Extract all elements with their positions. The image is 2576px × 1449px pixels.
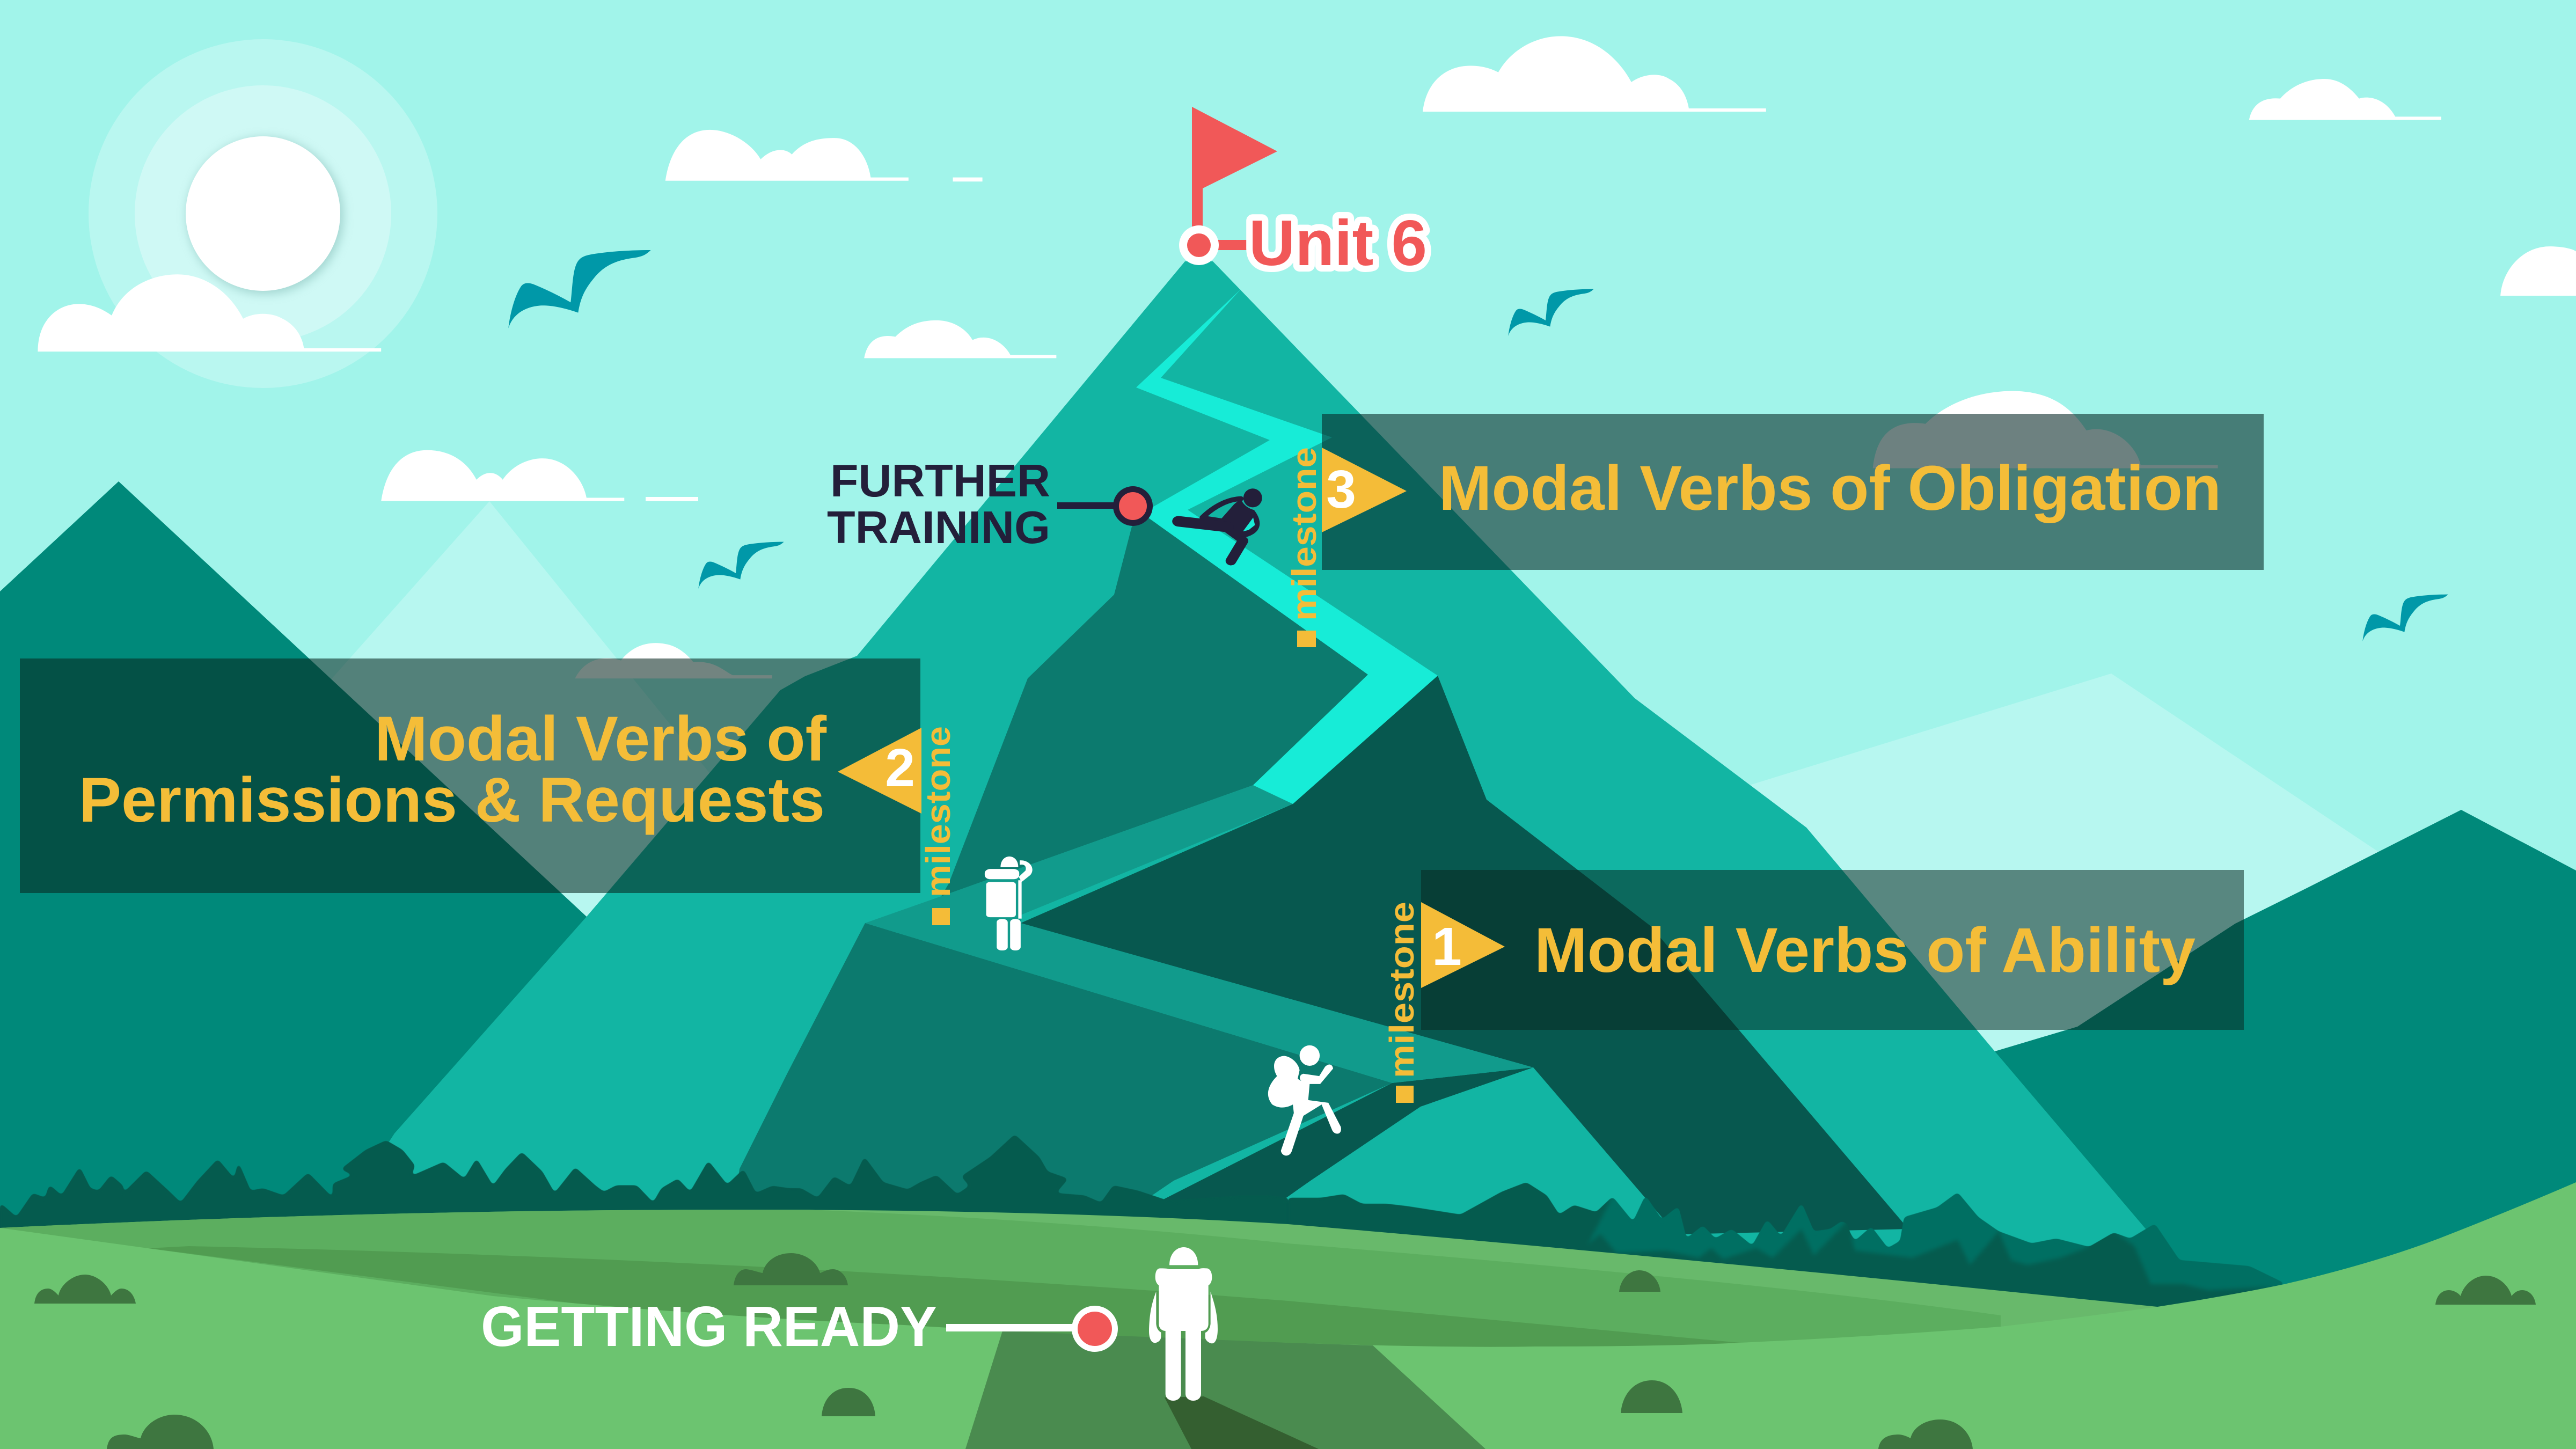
main mountain xyxy=(322,261,2200,1288)
dark hill band xyxy=(148,1246,1740,1395)
heading: modal verbs of permissions and requests xyxy=(79,704,827,836)
label: further training xyxy=(827,456,1050,553)
milestone 2 marker xyxy=(838,726,957,925)
trail shadow xyxy=(1165,1396,1319,1449)
milestone 3 marker: milestone xyxy=(1285,447,1323,621)
panel: modal verbs of permissions and requests xyxy=(20,658,920,893)
forest left and centre xyxy=(0,1135,1289,1255)
back hill xyxy=(0,1210,2157,1449)
clouds xyxy=(38,36,2576,501)
pale distant mountains xyxy=(258,501,2382,1073)
trail xyxy=(965,1331,1485,1449)
milestone 3 marker: 3 xyxy=(1326,459,1356,519)
further training node xyxy=(1057,486,1153,526)
bushes xyxy=(34,1253,2536,1449)
dark side mountains xyxy=(0,481,2576,1288)
milestone 2 marker: milestone xyxy=(919,726,957,897)
foreground meadow xyxy=(0,1182,2576,1449)
icon: hiker with bedroll xyxy=(985,857,1033,950)
mid hill band xyxy=(0,1210,2001,1449)
climbing route upper cyan band xyxy=(1136,289,1438,804)
mountain shadow facets xyxy=(730,517,1908,1234)
milestone 3 marker xyxy=(1285,447,1407,647)
summit flag xyxy=(1179,107,1277,265)
label: further training: FURTHER xyxy=(830,456,1050,507)
panel: modal verbs of ability xyxy=(1421,870,2244,1030)
birds xyxy=(508,250,2448,641)
climbing route lower band xyxy=(865,785,1533,1083)
cloud behind permissions box xyxy=(575,643,772,678)
panel: modal verbs of obligation xyxy=(1322,414,2264,570)
milestone 2 marker: 2 xyxy=(885,738,915,798)
milestone 1 marker: 1 xyxy=(1432,917,1462,977)
heading: modal verbs of permissions and requests: Permissions & Requests xyxy=(79,765,825,836)
heading: modal verbs of ability: Modal Verbs of Ability xyxy=(1534,915,2196,986)
milestone 1 marker: milestone xyxy=(1382,902,1421,1078)
icon: leaping climber xyxy=(1179,488,1262,561)
heading: modal verbs of obligation: Modal Verbs of Obligation xyxy=(1439,453,2221,524)
forest right xyxy=(1288,1182,2286,1311)
label: getting ready: GETTING READY xyxy=(481,1295,937,1358)
icon: standing hiker xyxy=(1149,1247,1218,1401)
sun xyxy=(89,39,437,388)
label: further training: TRAINING xyxy=(827,502,1050,553)
getting ready node xyxy=(946,1306,1118,1352)
milestone 1 marker xyxy=(1382,902,1505,1103)
label: unit 6: Unit 6 xyxy=(1249,207,1427,279)
heading: modal verbs of permissions and requests: Modal Verbs of xyxy=(375,704,827,774)
icon: climbing hiker xyxy=(1268,1045,1341,1155)
